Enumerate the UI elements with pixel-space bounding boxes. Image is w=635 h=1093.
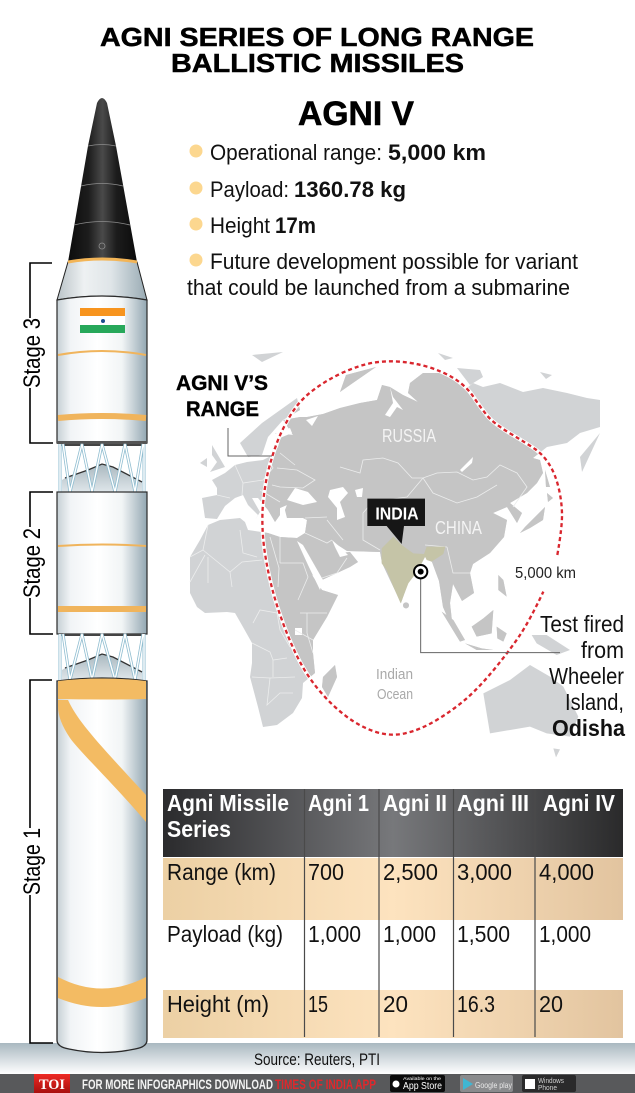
stage 2 bracket: [19, 492, 53, 634]
app store badge: Available on the: [403, 1076, 442, 1081]
row: range: [163, 858, 623, 920]
stage 3 bracket: [19, 263, 53, 443]
specification list: [187, 140, 578, 300]
test fired note: Odisha: [552, 715, 625, 741]
stage 1 bracket: Stage 1: [19, 828, 46, 895]
label: Indian Ocean: [376, 666, 413, 703]
interstage lattice upper: [59, 444, 145, 492]
test fired note: [540, 611, 625, 741]
specification list: Future development possible for variant: [210, 249, 578, 274]
agni v range label: AGNI V’S: [176, 372, 268, 395]
rocket illustration: [57, 98, 147, 1052]
row: height: 16.3: [457, 991, 495, 1017]
label: 5,000 km: 5,000 km: [515, 565, 576, 582]
floor band: [0, 1043, 635, 1074]
test fired note: from: [581, 637, 624, 663]
seas and lakes: [272, 387, 473, 635]
table header: Agni III: [457, 790, 529, 816]
app store badge: [390, 1075, 445, 1092]
footer bar: [0, 1074, 635, 1093]
row: range: Range (km): [167, 859, 276, 885]
stage 2 body: [57, 492, 147, 634]
interstage lattice lower: [59, 634, 145, 680]
table header: Agni 1: [308, 790, 369, 816]
upper shoulder: [57, 259, 147, 300]
stage 3 bracket: Stage 3: [19, 318, 46, 388]
label: Indian Ocean: Ocean: [377, 686, 413, 703]
windows phone badge: Phone: [538, 1085, 557, 1092]
label: China: CHINA: [435, 518, 482, 538]
heading: Agni V: AGNI V: [298, 95, 414, 133]
row: range: 3,000: [457, 859, 512, 885]
footer message: TIMES OF INDIA APP: [275, 1076, 376, 1092]
row: payload: 1,000: [539, 921, 591, 947]
land inside range: [265, 367, 553, 697]
windows phone badge: Windows: [538, 1078, 564, 1085]
table header: Agni II: [383, 790, 447, 816]
row: height: 15: [308, 991, 328, 1017]
toi logo: TOI: [39, 1077, 65, 1093]
title: [100, 22, 534, 78]
land outside range: [190, 352, 600, 757]
launch site marker: [414, 565, 560, 653]
india callout: [367, 499, 425, 544]
nose cone: [68, 98, 137, 262]
stage 2 bracket: Stage 2: [19, 528, 46, 598]
specification list: 17m: [275, 213, 316, 238]
india callout: INDIA: [375, 503, 419, 523]
title: AGNI SERIES OF LONG RANGE: [100, 22, 534, 52]
toi logo: [34, 1074, 70, 1093]
test fired note: Test fired: [540, 611, 624, 637]
row: range: 2,500: [383, 859, 438, 885]
table header: Agni IV: [543, 790, 616, 816]
row: payload: [167, 921, 591, 947]
table header: [163, 789, 623, 857]
row: height: 20: [539, 991, 563, 1017]
row: height: [163, 990, 623, 1038]
table header: Agni Missile: [167, 790, 289, 816]
footer message: FOR MORE INFOGRAPHICS DOWNLOAD: [82, 1076, 273, 1092]
india highlight: [382, 537, 445, 603]
country borders: [190, 453, 527, 705]
title: BALLISTIC MISSILES: [171, 48, 464, 78]
indian flag: [80, 308, 125, 333]
stage 1 body: [57, 678, 147, 1052]
missile series table: [163, 789, 623, 1038]
stage 3 body: [57, 296, 147, 443]
specification list: 1360.78 kg: [294, 177, 406, 202]
row: height: 20: [383, 991, 408, 1017]
stage 1 bracket: [19, 680, 53, 1043]
row: range: 4,000: [539, 859, 594, 885]
agni v range label: [176, 372, 272, 456]
app store badge: App Store: [403, 1081, 442, 1092]
specification list: 5,000 km: [388, 140, 486, 165]
label: Russia: RUSSIA: [382, 426, 436, 446]
range boundary: [262, 361, 562, 735]
row: payload: 1,500: [457, 921, 510, 947]
test fired note: Island,: [565, 689, 624, 715]
row: payload: 1,000: [383, 921, 436, 947]
agni v range label: RANGE: [186, 398, 259, 421]
table header: Series: [167, 816, 231, 842]
row: payload: 1,000: [308, 921, 361, 947]
google play badge: Google play: [475, 1080, 513, 1090]
test fired note: Wheeler: [549, 663, 624, 689]
row: height: Height (m): [167, 991, 269, 1017]
specification list: Payload:: [210, 177, 289, 202]
label: Indian Ocean: Indian: [376, 666, 413, 683]
range map: [190, 352, 600, 757]
row: payload: Payload (kg): [167, 921, 283, 947]
source note: Source: Reuters, PTI: [254, 1050, 380, 1069]
specification list: that could be launched from a submarine: [187, 275, 570, 300]
row: range: 700: [308, 859, 344, 885]
specification list: Height: [210, 213, 270, 238]
windows phone badge: [522, 1075, 576, 1092]
google play badge: [460, 1075, 513, 1092]
specification list: Operational range:: [210, 140, 382, 165]
